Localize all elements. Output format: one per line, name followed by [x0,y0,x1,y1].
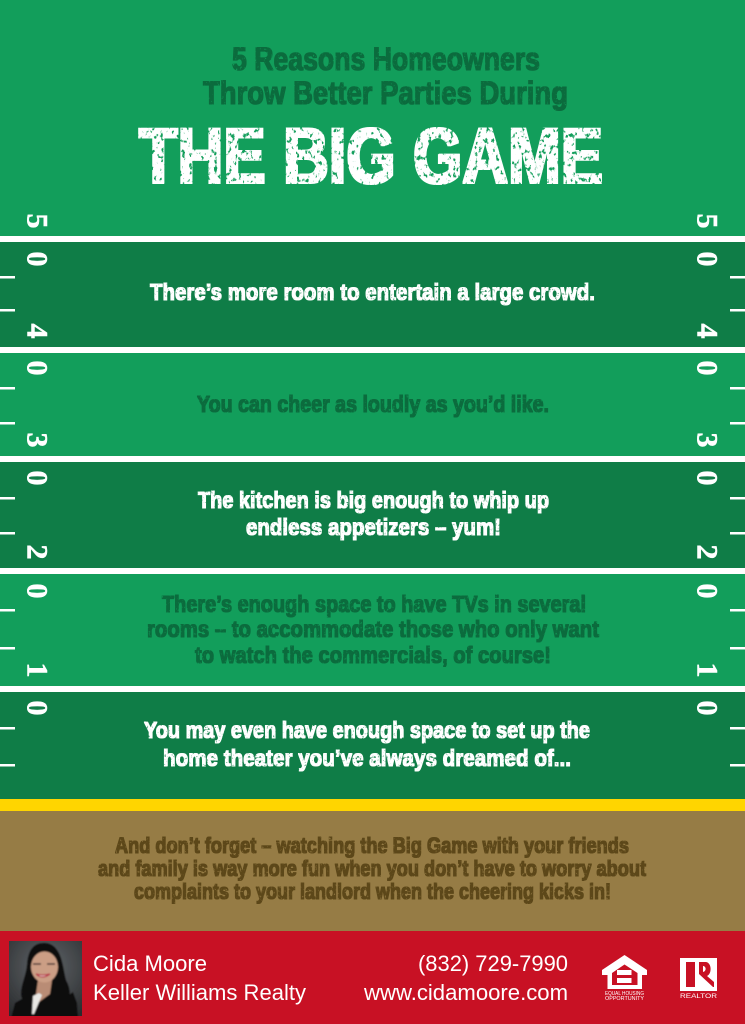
yard numbers: left: 0 [20,700,54,716]
panel: reason 1: There’s more room to entertain a large crowd. [150,279,595,305]
heading: subtitle [203,41,568,111]
yard numbers: right [690,214,724,716]
panel: reason 4: to watch the commercials, of course! [195,642,551,668]
phone and website: (832) 729-7990 [418,951,568,976]
panel: contact footer [0,931,745,1024]
yard numbers: right: 3 [690,432,724,448]
panel: reason 5 [0,692,745,799]
panel: reason 2: You can cheer as loudly as you’d like. [197,391,549,417]
yard numbers: left: 0 [20,470,54,486]
panel: reason 1 [0,242,745,347]
yard numbers: left [20,214,54,716]
yard numbers: left: 0 [20,252,54,266]
panel: reason 4: rooms – to accommodate those who only want [147,616,599,642]
yard numbers: right: 0 [690,470,724,486]
yard numbers: right: 4 [690,324,724,338]
panel: reason 2 [0,353,745,456]
title: THE BIG GAME [139,111,603,200]
yard numbers: left: 4 [20,324,54,338]
icon: realtor [680,958,717,1000]
yard numbers: right: 0 [690,252,724,266]
icon: equal housing opportunity [602,955,647,1002]
panel: reason 4: There’s enough space to have TVs in several [162,591,586,617]
yard numbers: right: 5 [690,214,724,228]
heading: subtitle: Throw Better Parties During [203,75,568,111]
goal line [0,799,745,811]
panel: end zone closing note [0,811,745,931]
agent name and brokerage: Keller Williams Realty [93,980,306,1005]
panel: reason 3: endless appetizers – yum! [246,514,501,540]
hash marks: left [0,276,15,766]
yard numbers: right: 0 [690,360,724,376]
phone and website [363,951,568,1005]
yard numbers: right: 0 [690,700,724,716]
yard numbers: left: 5 [20,214,54,228]
yard lines [0,236,745,692]
icon: equal housing opportunity: EQUAL HOUSING [605,991,644,997]
phone and website: www.cidamoore.com [363,980,568,1005]
yard numbers: left: 0 [20,584,54,598]
yard numbers: left: 2 [20,544,54,560]
panel: field header [0,0,745,236]
icon: realtor: REALTOR [680,993,717,1000]
icon: equal housing opportunity: OPPORTUNITY [605,996,645,1002]
panel: reason 3: The kitchen is big enough to whip up [198,487,549,513]
yard numbers: left: 3 [20,432,54,448]
agent name and brokerage: Cida Moore [93,951,207,976]
yard numbers: left: 0 [20,360,54,376]
yard numbers: left: 1 [20,662,54,678]
heading: subtitle: 5 Reasons Homeowners [232,41,540,77]
yard numbers: right: 1 [690,662,724,678]
yard numbers: right: 2 [690,544,724,560]
agent name and brokerage [93,951,306,1005]
hash marks: right [730,276,745,766]
panel: reason 4 [0,574,745,686]
panel: reason 3 [0,462,745,568]
panel: reason 5: home theater you’ve always dreamed of... [163,745,571,771]
panel: end zone closing note: and family is way more fun when you don’t have to worry about [98,856,647,881]
yard numbers: right: 0 [690,584,724,598]
panel: end zone closing note: complaints to your landlord when the cheering kicks in! [134,879,611,904]
panel: reason 5: You may even have enough space to set up the [144,717,590,743]
panel: end zone closing note: And don’t forget – watching the Big Game with your friends [115,833,629,858]
agent portrait [9,941,82,1016]
